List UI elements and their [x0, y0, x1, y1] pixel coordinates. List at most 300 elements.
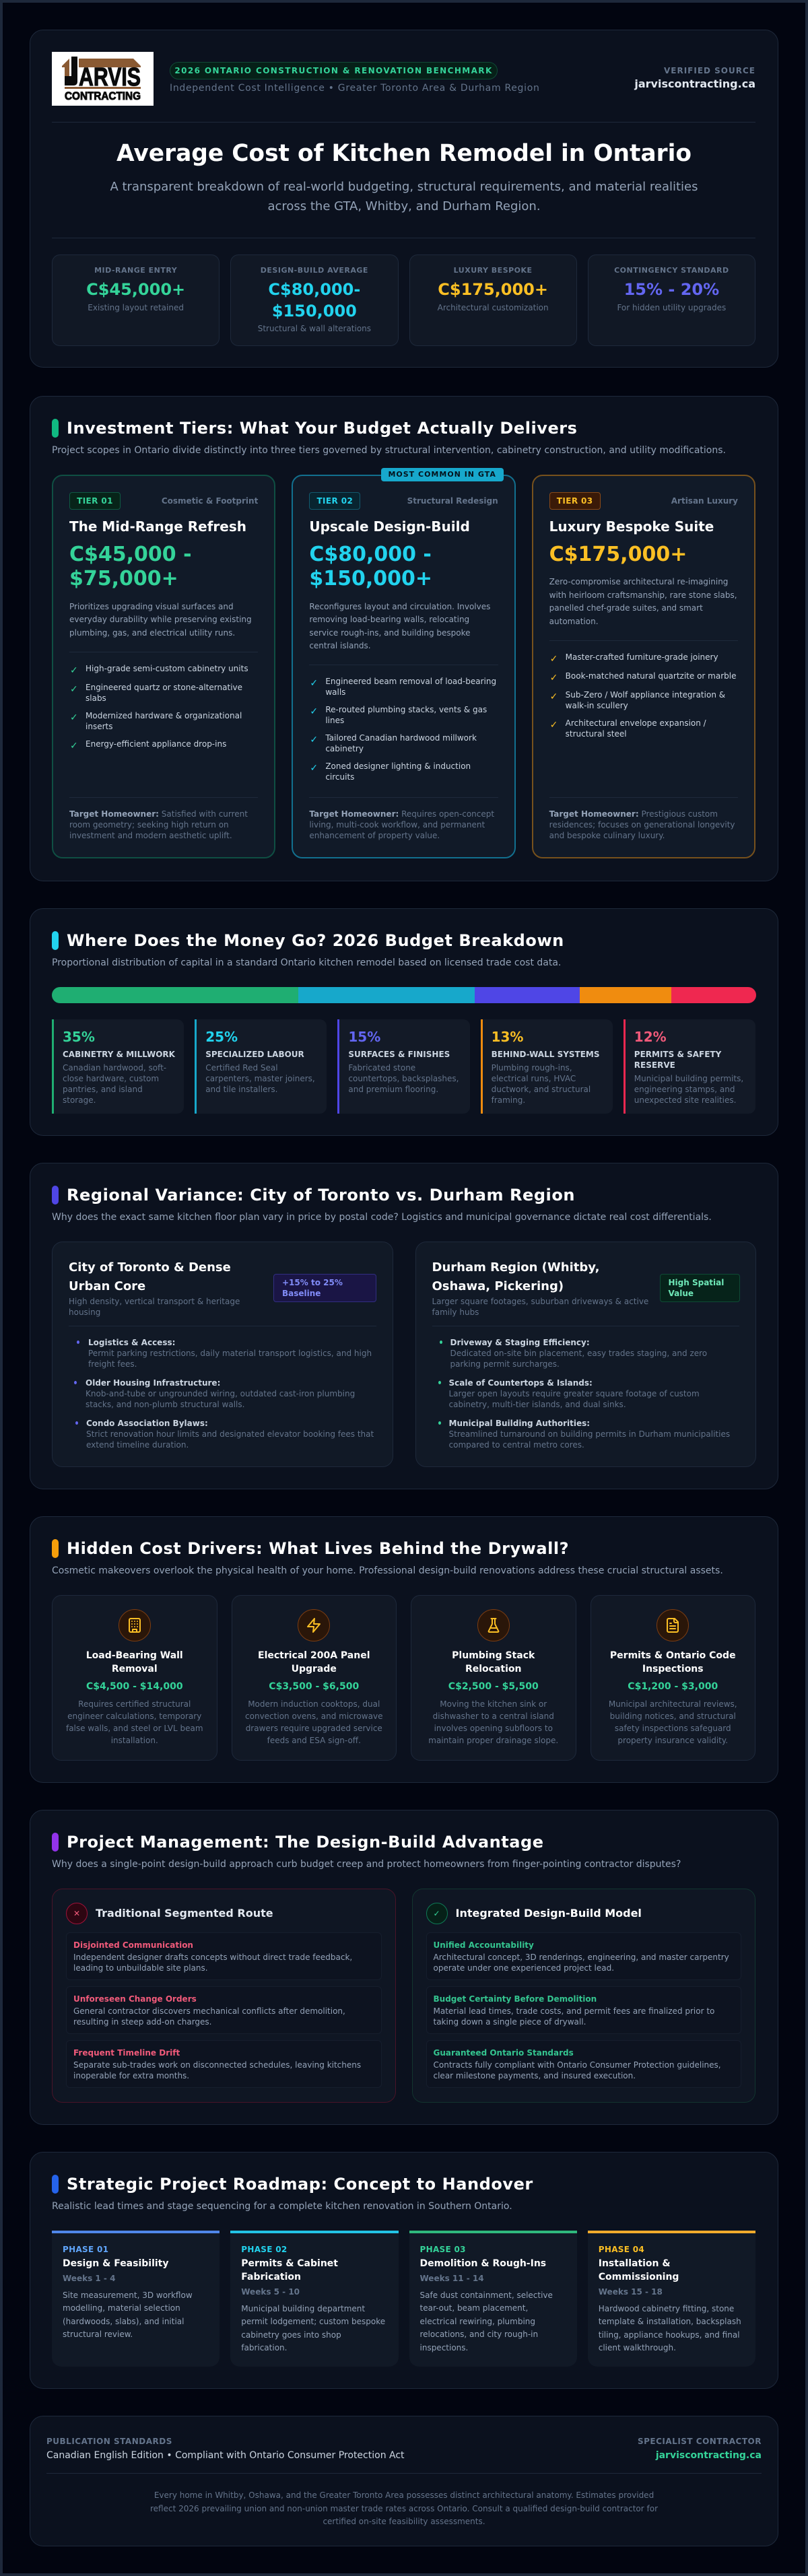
card: plumbing stack: Plumbing Stack: [452, 1650, 535, 1661]
card: tier 03: with heirloom craftsmanship, rare stone slabs,: [549, 590, 737, 600]
item: condo: [86, 1419, 374, 1450]
icon: cross: ✕: [73, 1909, 80, 1918]
card: tier 01: Target Homeowner: Satisfied with current: [69, 809, 248, 819]
card: tier 02: Re-routed plumbing stacks, vents & gas: [325, 705, 487, 714]
card: permits 12%: RESERVE: [634, 1060, 675, 1070]
item: logistics: [88, 1338, 372, 1369]
card: labour 25%: carpenters, master joiners,: [205, 1074, 315, 1083]
heading: Cosmetic makeovers overlook the physical health of your home. Professional design-build renovations address these crucial structural assets.: [52, 1565, 723, 1576]
card: tier 02: TIER 02: [316, 496, 353, 506]
card: tier 02: service rough-ins, and building bespoke: [309, 628, 471, 638]
heading: Why does a single-point design-build approach curb budget creep and protect homeowners from finger-pointing contractor disputes?: [52, 1859, 681, 1870]
badge: most common: [381, 468, 504, 481]
card: tier 02: lines: [325, 716, 344, 725]
card: tier 02: removing load-bearing walls, relocating: [309, 615, 469, 624]
panel: report header: [30, 30, 778, 368]
card: permits: Permits & Ontario Code: [610, 1650, 736, 1661]
stat: design-build: $150,000: [272, 302, 357, 320]
item: communication: leading to unbuildable site plans.: [73, 1963, 208, 1973]
card: systems 13%: framing.: [492, 1095, 525, 1105]
item: older housing: stacks, and non-plumb structural walls.: [86, 1400, 244, 1409]
item: scale: [448, 1378, 700, 1409]
card: permits: Municipal architectural reviews,: [609, 1699, 737, 1709]
card: labour 25%: and tile installers.: [205, 1085, 277, 1094]
card: tier 03: ✓: [550, 720, 558, 731]
card: systems 13%: Plumbing rough-ins,: [492, 1063, 572, 1073]
card: phase 03: inspections.: [420, 2343, 468, 2352]
item: change orders: resulting in steep add-on charges.: [73, 2017, 211, 2027]
stat: design-build: Structural & wall alterations: [258, 324, 371, 333]
publication standards: Canadian English Edition • Compliant with Ontario Consumer Protection Act: [46, 2450, 405, 2461]
card: tier 01: ✓: [70, 684, 78, 695]
item: driveway: parking permit surcharges.: [450, 1359, 560, 1369]
card: electrical panel: [232, 1595, 397, 1761]
card: tier 03: Book-matched natural quartzite or marble: [566, 671, 736, 681]
card: phase 03: Demolition & Rough-Ins: [420, 2258, 546, 2269]
card: permits: building notices, and structural: [610, 1711, 736, 1721]
card: permits 12%: engineering stamps, and: [634, 1085, 735, 1094]
card: surfaces 15%: Fabricated stone: [348, 1063, 415, 1073]
card: tier 02: circuits: [325, 772, 354, 782]
disclaimer: Every home in Whitby, Oshawa, and the Greater Toronto Area possesses distinct architectural anatomy. Estimates provided: [154, 2490, 654, 2500]
card: cabinetry 35%: close hardware, custom: [63, 1074, 159, 1083]
card: tier 02: Upscale Design-Build: [309, 518, 470, 535]
card: systems 13%: ductwork, and structural: [492, 1085, 591, 1094]
card: tier 02: Structural Redesign: [407, 496, 498, 506]
logo: Jarvis Contracting: CONTRACTING: [65, 90, 141, 102]
card: tier 01: plumbing, gas, and electrical utility runs.: [69, 628, 235, 638]
card: cabinetry 35%: [52, 1019, 184, 1114]
badge: toronto premium: Baseline: [282, 1289, 321, 1298]
card: permits 12%: 12%: [634, 1029, 667, 1045]
badge: most common: MOST COMMON IN GTA: [388, 470, 496, 479]
item: accountability: operate under one experienced project lead.: [434, 1963, 614, 1973]
card: tier 01: Modernized hardware & organizational: [86, 711, 242, 720]
card: tier 02: walls: [325, 687, 345, 697]
stat: contingency: 15% - 20%: [624, 280, 719, 299]
card: tier 02: Engineered beam removal of load-bearing: [325, 677, 496, 686]
icon: flask: [477, 1609, 510, 1641]
card: phase 02: fabrication.: [241, 2343, 287, 2352]
card: tier 01: Energy-efficient appliance drop-ins: [86, 739, 226, 749]
item: communication: [66, 1932, 381, 1980]
heading: Realistic lead times and stage sequencing for a complete kitchen renovation in Southern Ontario.: [52, 2201, 512, 2212]
card: tier 03: automation.: [549, 617, 599, 626]
item: condo: Condo Association Bylaws:: [86, 1419, 208, 1428]
card: plumbing stack: C$2,500 - $5,500: [448, 1681, 539, 1692]
specialist contractor: SPECIALIST CONTRACTOR: [638, 2437, 762, 2446]
item: scale: cabinetry, multi-tier islands, and dual sinks.: [448, 1400, 626, 1409]
panel: regional variance: [30, 1163, 778, 1489]
card: Durham: family hubs: [432, 1308, 479, 1317]
card: permits: property insurance validity.: [617, 1736, 728, 1745]
card: tier 01: everyday durability while preserving existing: [69, 615, 252, 624]
card: labour 25%: 25%: [205, 1029, 238, 1045]
card: Toronto: City of Toronto & Dense: [69, 1260, 231, 1275]
card: load-bearing wall: installation.: [111, 1736, 158, 1745]
card: tier 03: residences; focuses on generational longevity: [549, 820, 735, 829]
card: tier 01: Cosmetic & Footprint: [162, 496, 258, 506]
card: Durham: Durham Region (Whitby,: [432, 1260, 599, 1275]
card: tier 03: Sub-Zero / Wolf appliance integration &: [566, 690, 725, 700]
card: phase 01: PHASE 01: [63, 2245, 108, 2254]
card: permits: Inspections: [642, 1664, 704, 1674]
card: Durham: Oshawa, Pickering): [432, 1279, 564, 1293]
item: timeline: [66, 2040, 381, 2088]
card: tier 01: room geometry; seeking high return on: [69, 820, 229, 829]
card: load-bearing wall: C$4,500 - $14,000: [86, 1681, 183, 1692]
card: phase 01: structural review.: [63, 2330, 133, 2339]
card: tier 02: living, multi-cook workflow, and permanent: [309, 820, 485, 829]
icon: check: ✓: [433, 1909, 440, 1918]
item: communication: Disjointed Communication: [73, 1940, 193, 1950]
item: communication: Independent designer drafts concepts without direct trade feedback,: [73, 1953, 352, 1962]
card: electrical panel: Upgrade: [292, 1664, 337, 1674]
publication standards: [46, 2437, 405, 2461]
card: permits 12%: unexpected site realities.: [634, 1095, 736, 1105]
card: phase 04: Hardwood cabinetry fitting, stone: [599, 2304, 734, 2313]
card: plumbing stack: Relocation: [465, 1664, 521, 1674]
card: permits 12%: Municipal building permits,: [634, 1074, 743, 1083]
card: load-bearing wall: engineer calculations, temporary: [67, 1711, 201, 1721]
item: logistics: Permit parking restrictions, daily material transport logistics, and high: [88, 1349, 372, 1358]
card: cabinetry 35%: pantries, and island: [63, 1085, 143, 1094]
card: tier 01: ✓: [70, 665, 78, 676]
card: phase 03: PHASE 03: [420, 2245, 466, 2254]
card: phase 02: Weeks 5 - 10: [241, 2287, 300, 2297]
stat: luxury: LUXURY BESPOKE: [454, 266, 533, 275]
panel: roadmap: [30, 2152, 778, 2389]
card: tier 01: Prioritizes upgrading visual surfaces and: [69, 602, 234, 611]
icon: check: [426, 1903, 447, 1924]
card: systems 13%: 13%: [492, 1029, 523, 1045]
heading: Regional Variance: City of Toronto vs. Durham Region: [67, 1186, 575, 1205]
stat: design-build: DESIGN-BUILD AVERAGE: [261, 266, 368, 275]
subtitle: A transparent breakdown of real-world budgeting, structural requirements, and material realities: [110, 180, 698, 194]
card: Durham: Larger square footages, suburban driveways & active: [432, 1297, 648, 1306]
card: load-bearing wall: Load-Bearing Wall: [86, 1650, 183, 1661]
card: tier 01: [52, 475, 275, 858]
card: tier 01: ✓: [70, 712, 78, 723]
item: change orders: [66, 1986, 381, 2034]
subtitle: across the GTA, Whitby, and Durham Region.: [267, 199, 541, 213]
stat: mid-range: [52, 255, 220, 346]
card: tier 01: TIER 01: [77, 496, 113, 506]
item: municipal: [448, 1419, 730, 1450]
card: surfaces 15%: 15%: [348, 1029, 380, 1045]
card: electrical panel: Modern induction cooktops, dual: [248, 1699, 380, 1709]
card: phase 03: [409, 2231, 577, 2367]
stat: mid-range: MID-RANGE ENTRY: [94, 266, 177, 275]
card: tier 01: ✓: [70, 741, 78, 751]
stat: luxury: C$175,000+: [438, 280, 548, 299]
card: tier 01: C$45,000 -: [69, 543, 192, 566]
panel: hidden cost drivers: [30, 1516, 778, 1783]
card: phase 03: tear-out, beam placement,: [420, 2303, 528, 2313]
card: permits 12%: [624, 1019, 755, 1114]
card: Toronto: High density, vertical transport & heritage: [69, 1297, 240, 1306]
card: Toronto: Urban Core: [69, 1279, 145, 1293]
card: tier 03: ✓: [550, 691, 558, 702]
icon: document: [656, 1609, 689, 1641]
card: load-bearing wall: Removal: [112, 1664, 158, 1674]
stat: design-build: C$80,000-: [268, 280, 360, 299]
card: labour 25%: [195, 1019, 327, 1114]
card: surfaces 15%: SURFACES & FINISHES: [348, 1050, 450, 1059]
verified source: jarviscontracting.ca: [634, 77, 755, 90]
card: phase 01: Site measurement, 3D workflow: [63, 2291, 193, 2300]
badge: toronto premium: +15% to 25%: [282, 1278, 343, 1287]
card: traditional route: Traditional Segmented Route: [96, 1907, 273, 1920]
item: timeline: Separate sub-trades work on disconnected schedules, leaving kitchens: [73, 2060, 361, 2070]
card: tier 01: Engineered quartz or stone-alternative: [86, 683, 242, 692]
heading: [52, 1186, 712, 1223]
card: phase 04: Weeks 15 - 18: [599, 2287, 663, 2297]
card: traditional route: [52, 1889, 396, 2103]
card: plumbing stack: dishwasher to a central island: [433, 1711, 554, 1721]
card: systems 13%: BEHIND-WALL SYSTEMS: [492, 1050, 600, 1059]
card: electrical panel: Electrical 200A Panel: [258, 1650, 370, 1661]
card: tier 03: Artisan Luxury: [671, 496, 738, 506]
card: integrated model: [412, 1889, 755, 2103]
badge: benchmark: 2026 ONTARIO CONSTRUCTION & RENOVATION BENCHMARK: [174, 66, 493, 75]
heading: Project Management: The Design-Build Advantage: [67, 1833, 544, 1852]
card: tier 02: Target Homeowner: Requires open-concept: [309, 809, 494, 819]
card: tier 02: central islands.: [309, 641, 371, 650]
specialist contractor: [638, 2437, 762, 2461]
card: surfaces 15%: and premium flooring.: [348, 1085, 438, 1094]
item: municipal: Streamlined turnaround on building permits in Durham municipalities: [448, 1429, 730, 1439]
card: phase 03: relocations, and city rough-in: [420, 2330, 538, 2339]
item: driveway: [450, 1338, 707, 1369]
card: phase 01: (hardwoods, slabs), and initial: [63, 2317, 184, 2326]
card: tier 03: Luxury Bespoke Suite: [549, 518, 714, 535]
card: tier 03: Zero-compromise architectural re-imagining: [549, 577, 728, 586]
card: phase 01: Weeks 1 - 4: [63, 2274, 115, 2283]
item: budget certainty: taking down a single piece of drywall.: [434, 2017, 586, 2027]
card: permits: safety inspections safeguard: [615, 1724, 731, 1733]
stat: contingency: [588, 255, 755, 346]
item: municipal: compared to central metro cores.: [448, 1440, 584, 1450]
card: phase 04: client walkthrough.: [599, 2343, 676, 2352]
tagline: Independent Cost Intelligence • Greater Toronto Area & Durham Region: [170, 83, 540, 94]
card: phase 04: template & installation, backsplash: [599, 2317, 741, 2326]
card: cabinetry 35%: CABINETRY & MILLWORK: [63, 1050, 175, 1059]
card: tier 03: and bespoke culinary luxury.: [549, 831, 665, 840]
card: tier 03: TIER 03: [557, 496, 593, 506]
panel: budget breakdown: [30, 908, 778, 1136]
card: load-bearing wall: Requires certified structural: [78, 1699, 191, 1709]
heading: Project scopes in Ontario divide distinctly into three tiers governed by structural intervention, cabinetry construction, and utility modifications.: [52, 445, 726, 456]
card: electrical panel: feeds and ESA sign-off.: [267, 1736, 361, 1745]
card: tier 02: enhancement of property value.: [309, 831, 440, 840]
card: surfaces 15%: [337, 1019, 470, 1114]
card: plumbing stack: involves opening subfloors to: [434, 1724, 553, 1733]
badge: durham value: Value: [668, 1289, 694, 1298]
card: phase 04: Installation &: [599, 2258, 671, 2269]
item: standards: Guaranteed Ontario Standards: [434, 2048, 574, 2058]
card: tier 01: slabs: [86, 693, 106, 703]
icon: cross: [66, 1903, 88, 1924]
card: phase 04: PHASE 04: [599, 2245, 644, 2254]
card: surfaces 15%: countertops, backsplashes,: [348, 1074, 459, 1083]
card: phase 01: modelling, material selection: [63, 2303, 180, 2313]
badge: benchmark: [170, 62, 498, 79]
card: load-bearing wall: false walls, and steel or LVL beam: [66, 1724, 203, 1733]
card: load-bearing wall: [52, 1595, 217, 1761]
panel: investment tiers: [30, 396, 778, 881]
heading: Investment Tiers: What Your Budget Actually Delivers: [67, 419, 578, 438]
item: municipal: Municipal Building Authorities:: [448, 1419, 590, 1428]
item: accountability: Unified Accountability: [434, 1940, 534, 1950]
card: tier 02: cabinetry: [325, 744, 364, 753]
card: tier 03: structural steel: [566, 729, 627, 739]
stat: mid-range: Existing layout retained: [88, 303, 184, 312]
card: tier 02: ✓: [310, 706, 318, 717]
card: tier 03: ✓: [550, 673, 558, 683]
card: phase 04: tiling, appliance hookups, and final: [599, 2330, 740, 2340]
card: systems 13%: electrical runs, HVAC: [492, 1074, 576, 1083]
stat: luxury: [409, 255, 577, 346]
card: tier 03: Target Homeowner: Prestigious custom: [549, 809, 718, 819]
card: tier 01: The Mid-Range Refresh: [69, 518, 246, 535]
logo: Jarvis Contracting: [52, 52, 154, 106]
card: cabinetry 35%: Canadian hardwood, soft-: [63, 1063, 166, 1073]
card: tier 02: C$80,000 -: [309, 543, 432, 566]
card: tier 03: Master-crafted furniture-grade joinery: [566, 652, 718, 662]
card: phase 04: [588, 2231, 755, 2367]
item: budget certainty: Material lead times, trade costs, and permit fees are finalized prior to: [434, 2006, 714, 2016]
card: tier 02: [292, 475, 516, 858]
heading: Hidden Cost Drivers: What Lives Behind the Drywall?: [67, 1539, 569, 1558]
item: timeline: Frequent Timeline Drift: [73, 2048, 180, 2058]
card: tier 02: ✓: [310, 763, 318, 774]
heading: Where Does the Money Go? 2026 Budget Breakdown: [67, 931, 564, 950]
item: condo: Strict renovation hour limits and designated elevator booking fees that: [86, 1429, 374, 1439]
card: phase 02: PHASE 02: [241, 2245, 287, 2254]
stat: design-build: [230, 255, 399, 346]
item: timeline: inoperable for extra months.: [73, 2071, 189, 2080]
item: change orders: Unforeseen Change Orders: [73, 1994, 197, 2004]
card: electrical panel: convection ovens, and microwave: [245, 1711, 382, 1721]
card: tier 03: [532, 475, 755, 858]
card: systems 13%: [481, 1019, 613, 1114]
icon: building: [119, 1609, 151, 1641]
card: phase 03: Weeks 11 - 14: [420, 2274, 484, 2283]
item: logistics: Logistics & Access:: [88, 1338, 175, 1347]
heading: Proportional distribution of capital in a standard Ontario kitchen remodel based on licensed trade cost data.: [52, 957, 561, 968]
badge: toronto premium: [273, 1274, 376, 1302]
item: older housing: Older Housing Infrastructure:: [86, 1378, 220, 1388]
item: driveway: Dedicated on-site bin placement, easy trades staging, and zero: [450, 1349, 707, 1358]
heading: [52, 1539, 723, 1576]
item: accountability: Architectural concept, 3D renderings, engineering, and master carpentry: [434, 1953, 729, 1962]
item: driveway: Driveway & Staging Efficiency:: [450, 1338, 590, 1347]
card: phase 03: Safe dust containment, selective: [420, 2291, 553, 2300]
card: tier 01: $75,000+: [69, 567, 178, 590]
card: tier 03: Architectural envelope expansion /: [566, 718, 706, 728]
card: tier 02: ✓: [310, 735, 318, 745]
card: cabinetry 35%: 35%: [63, 1029, 95, 1045]
heading: [52, 931, 564, 968]
card: tier 01: High-grade semi-custom cabinetry units: [86, 664, 248, 673]
item: accountability: [426, 1932, 741, 1980]
card: phase 04: Commissioning: [599, 2272, 679, 2282]
stat: luxury: Architectural customization: [438, 303, 549, 312]
card: tier 03: C$175,000+: [549, 543, 687, 566]
stat: contingency: For hidden utility upgrades: [617, 303, 726, 312]
card: electrical panel: C$3,500 - $6,500: [269, 1681, 359, 1692]
chart: stacked budget bar: [52, 987, 756, 1003]
card: phase 01: Design & Feasibility: [63, 2258, 168, 2269]
card: tier 03: panelled chef-grade suites, and smart: [549, 603, 703, 613]
card: labour 25%: SPECIALIZED LABOUR: [205, 1050, 304, 1059]
card: integrated model: Integrated Design-Build Model: [455, 1907, 642, 1920]
stat: contingency: CONTINGENCY STANDARD: [614, 266, 729, 275]
card: plumbing stack: maintain proper drainage slope.: [428, 1736, 558, 1745]
heading: Strategic Project Roadmap: Concept to Handover: [67, 2175, 533, 2194]
panel: project management: [30, 1810, 778, 2125]
card: phase 02: [230, 2231, 399, 2367]
disclaimer: reflect 2026 prevailing union and non-union master trade rates across Ontario. Consult a qualified design-build contractor for: [150, 2503, 658, 2513]
card: plumbing stack: Moving the kitchen sink or: [440, 1699, 547, 1709]
card: tier 03: ✓: [550, 654, 558, 665]
card: phase 02: Fabrication: [241, 2272, 301, 2282]
card: phase 03: electrical rewiring, plumbing: [420, 2317, 535, 2326]
item: logistics: freight fees.: [88, 1359, 137, 1369]
item: scale: Larger open layouts require greater square footage of custom: [448, 1389, 700, 1398]
verified source: VERIFIED SOURCE: [664, 66, 755, 75]
item: older housing: [86, 1378, 355, 1409]
heading: [52, 1833, 681, 1870]
card: tier 01: investment and modern aesthetic uplift.: [69, 831, 232, 840]
card: phase 02: permit lodgement; custom bespoke: [241, 2317, 385, 2326]
panel: footer: [30, 2416, 778, 2546]
item: standards: clear milestone payments, and insured execution.: [434, 2071, 636, 2080]
heading: Why does the exact same kitchen floor plan vary in price by postal code? Logistics and municipal governance dictate real cost differentials.: [52, 1212, 712, 1223]
card: phase 02: Municipal building department: [241, 2304, 365, 2313]
card: Durham: [415, 1242, 756, 1467]
card: tier 03: walk-in scullery: [566, 701, 628, 710]
card: plumbing stack: [411, 1595, 576, 1761]
card: cabinetry 35%: storage.: [63, 1095, 96, 1105]
item: standards: Contracts fully compliant with Ontario Consumer Protection guidelines,: [434, 2060, 721, 2070]
disclaimer: certified on-site feasibility assessments.: [323, 2517, 485, 2526]
publication standards: PUBLICATION STANDARDS: [46, 2437, 172, 2446]
card: permits: C$1,200 - $3,000: [628, 1681, 718, 1692]
item: change orders: General contractor discovers mechanical conflicts after demolition,: [73, 2006, 345, 2016]
card: Toronto: housing: [69, 1308, 100, 1317]
icon: lightning: [298, 1609, 330, 1641]
title: Average Cost of Kitchen Remodel in Ontario: [116, 140, 692, 167]
item: budget certainty: [426, 1986, 741, 2034]
verified source: [634, 66, 755, 90]
card: tier 02: Zoned designer lighting & induction: [325, 761, 471, 771]
badge: durham value: [660, 1274, 739, 1302]
card: phase 02: Permits & Cabinet: [241, 2258, 338, 2269]
card: permits: [590, 1595, 755, 1761]
item: scale: Scale of Countertops & Islands:: [448, 1378, 593, 1388]
heading: [52, 2175, 533, 2212]
item: older housing: Knob-and-tube or ungrounded wiring, outdated cast-iron plumbing: [86, 1389, 355, 1398]
card: tier 02: Reconfigures layout and circulation. Involves: [309, 602, 490, 611]
card: phase 02: cabinetry goes into shop: [241, 2330, 341, 2340]
card: permits 12%: PERMITS & SAFETY: [634, 1050, 721, 1059]
item: condo: extend timeline duration.: [86, 1440, 189, 1450]
card: Toronto: [52, 1242, 393, 1467]
specialist contractor: jarviscontracting.ca: [656, 2450, 762, 2461]
card: phase 01: [52, 2231, 220, 2367]
